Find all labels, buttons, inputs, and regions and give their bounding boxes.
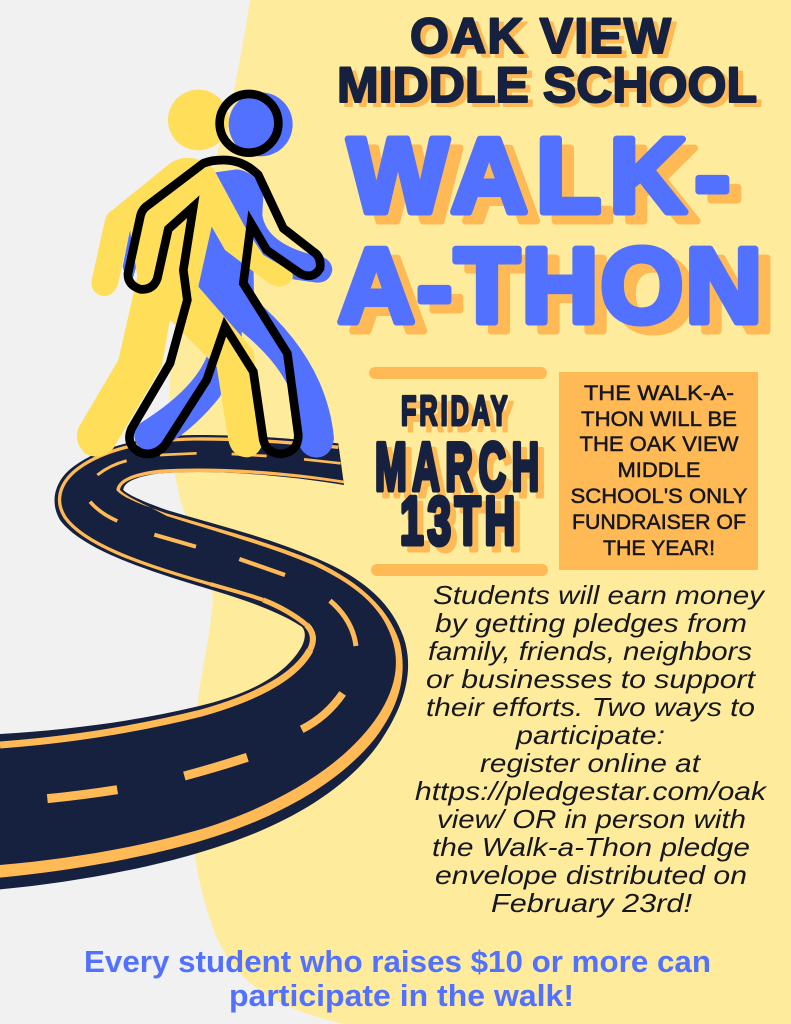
winding road — [0, 435, 408, 889]
body paragraph: envelope distributed on — [435, 860, 747, 890]
body paragraph: the Walk-a-Thon pledge — [432, 832, 750, 862]
body paragraph: February 23rd! — [491, 888, 692, 918]
line: Oak View: OAK VIEW — [410, 8, 672, 64]
month: MARCH — [375, 428, 545, 505]
body paragraph: Students will earn money — [433, 580, 766, 610]
headline line one: WALK- — [348, 117, 730, 235]
body paragraph — [415, 580, 768, 918]
callout text: THE WALK-A- — [584, 382, 734, 405]
body paragraph: their efforts. Two ways to — [426, 692, 755, 722]
callout text: THE OAK VIEW — [580, 433, 739, 456]
body paragraph: register online at — [480, 748, 702, 778]
walking figures — [77, 90, 334, 458]
black figure outline — [128, 94, 320, 454]
footer message: Every student who raises $10 or more can — [84, 944, 711, 979]
callout text: THON WILL BE — [581, 408, 737, 431]
yellow walking figure — [77, 90, 293, 457]
blue walking figure — [123, 92, 334, 458]
lane dashes — [47, 453, 356, 799]
day: FRIDAY — [401, 389, 510, 435]
body paragraph: participate: — [515, 720, 665, 750]
body paragraph: by getting pledges from — [435, 608, 747, 638]
body paragraph: or businesses to support — [426, 664, 757, 694]
callout text: FUNDRAISER OF — [572, 511, 746, 534]
road surface — [0, 435, 408, 889]
bottom divider bar — [371, 564, 548, 576]
callout text — [570, 382, 748, 560]
line: Middle School: MIDDLE SCHOOL — [337, 57, 757, 113]
date number: 13TH — [400, 484, 519, 560]
headline line two: A-THON — [338, 227, 762, 345]
headline: Walk-a-Thon — [338, 117, 762, 345]
road inner edge line — [0, 439, 338, 745]
footer message: participate in the walk! — [229, 978, 574, 1013]
road outer edge line — [0, 469, 403, 878]
callout text: MIDDLE — [618, 459, 700, 482]
callout text: THE YEAR! — [603, 537, 715, 560]
body paragraph: family, friends, neighbors — [428, 636, 752, 666]
event date — [375, 389, 545, 560]
top divider bar — [369, 367, 547, 379]
callout text: SCHOOL'S ONLY — [570, 485, 748, 508]
footer message — [84, 944, 711, 1013]
body paragraph: view/ OR in person with — [437, 804, 746, 834]
callout box: only fundraiser — [559, 372, 758, 570]
callout background — [559, 372, 758, 570]
cream background blob — [170, 0, 791, 1024]
title: school name — [337, 8, 757, 113]
body paragraph: https://pledgestar.com/oak — [415, 776, 768, 806]
